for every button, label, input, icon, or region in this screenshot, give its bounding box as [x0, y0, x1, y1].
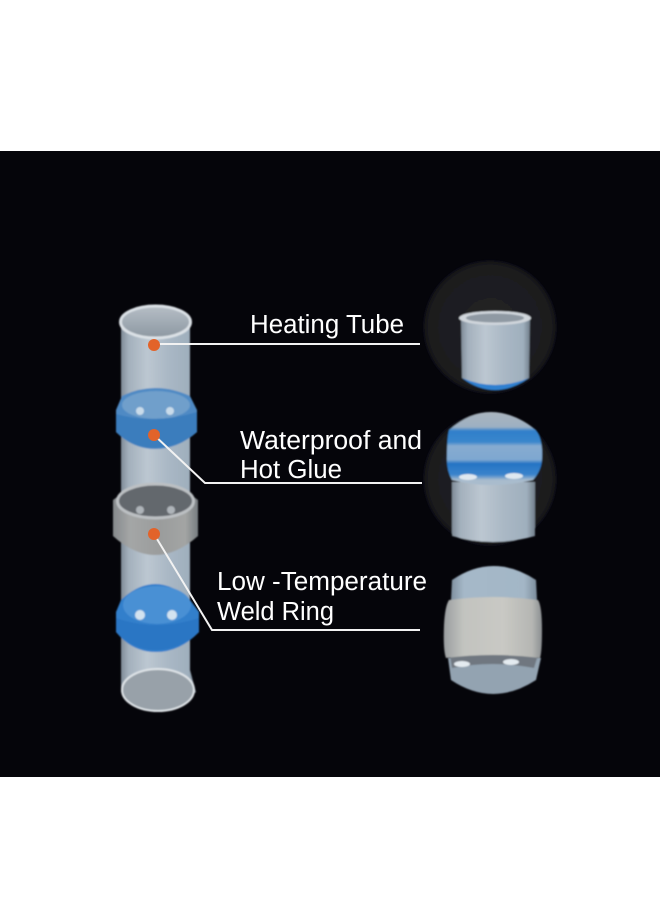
clear tube body	[121, 320, 196, 710]
lower blue glue band	[116, 584, 199, 652]
label: Low -Temperature Weld Ring: Low -Temperature	[217, 568, 427, 596]
orange markers	[148, 339, 160, 540]
black background band	[0, 151, 660, 777]
main connector tube	[113, 306, 199, 711]
leader lines	[154, 344, 422, 630]
upper blue glue band	[116, 388, 197, 449]
label: Waterproof and Hot Glue: Hot Glue	[240, 456, 342, 484]
inset: heating tube	[423, 260, 557, 394]
bottom opening	[122, 669, 194, 711]
label: Low -Temperature Weld Ring	[217, 568, 427, 626]
label: Heating Tube: Heating Tube	[250, 311, 404, 339]
top opening	[120, 306, 190, 338]
metal weld ring	[113, 483, 198, 555]
inset: hot glue	[423, 412, 557, 546]
label: Low -Temperature Weld Ring: Weld Ring	[217, 598, 334, 626]
label: Waterproof and Hot Glue	[240, 427, 422, 484]
inset: weld ring	[444, 566, 542, 694]
label: Waterproof and Hot Glue: Waterproof and	[240, 427, 422, 455]
